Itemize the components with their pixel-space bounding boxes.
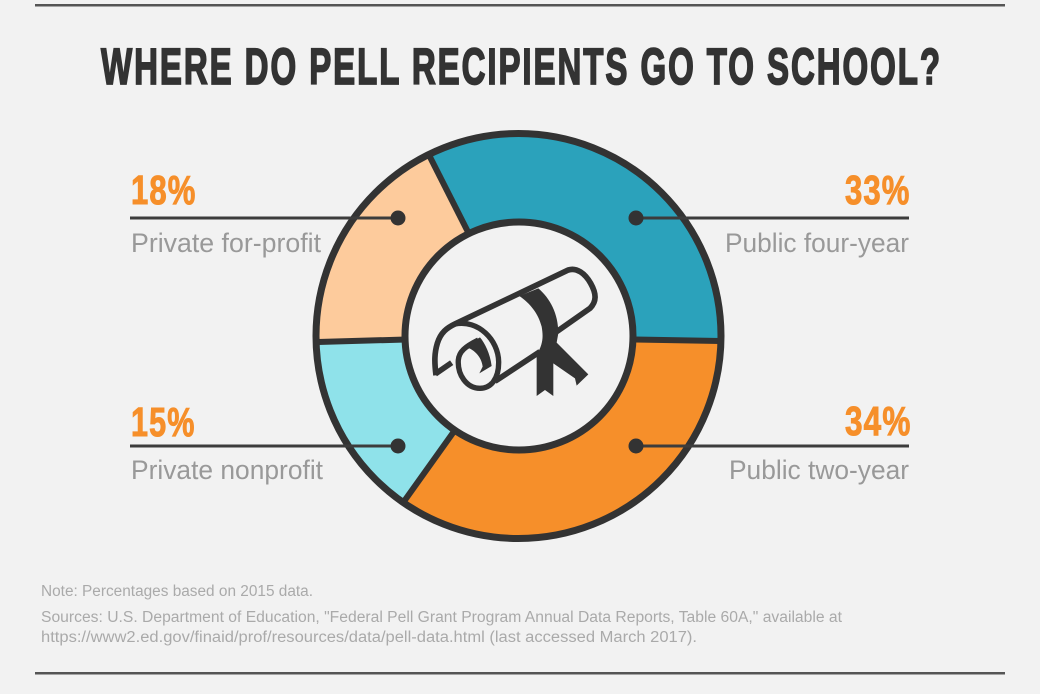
icon: diploma scroll <box>435 269 595 396</box>
ribbon <box>519 288 588 396</box>
segment: private for-profit <box>320 159 464 339</box>
callout: public two-year <box>628 398 912 485</box>
center circle <box>405 222 633 450</box>
segment: public two-year <box>408 342 718 535</box>
footnote: Note: Percentages based on 2015 data. <box>41 583 313 600</box>
footnote <box>41 583 843 646</box>
callout: private nonprofit: Private nonprofit <box>131 455 324 485</box>
callout: private nonprofit: 15% <box>131 399 196 445</box>
segment: public four-year <box>433 137 718 338</box>
callout: private for-profit <box>130 167 406 258</box>
callout: public four-year <box>628 167 910 258</box>
segment: private nonprofit <box>320 342 450 498</box>
callout: private for-profit: Private for-profit <box>131 228 322 258</box>
callout: public four-year: 33% <box>845 167 910 213</box>
callout: public two-year: Public two-year <box>729 455 909 485</box>
footnote: https://www2.ed.gov/finaid/prof/resources/data/pell-data.html (last accessed March 2017). <box>41 629 697 646</box>
footnote: Sources: U.S. Department of Education, "Federal Pell Grant Program Annual Data Reports, Table 60A," available at <box>41 609 843 626</box>
donut chart <box>312 130 724 542</box>
callout: public two-year: 34% <box>845 398 912 444</box>
callout: private nonprofit <box>130 399 406 485</box>
callout: private for-profit: 18% <box>131 167 196 213</box>
callout: public four-year: Public four-year <box>725 228 909 258</box>
